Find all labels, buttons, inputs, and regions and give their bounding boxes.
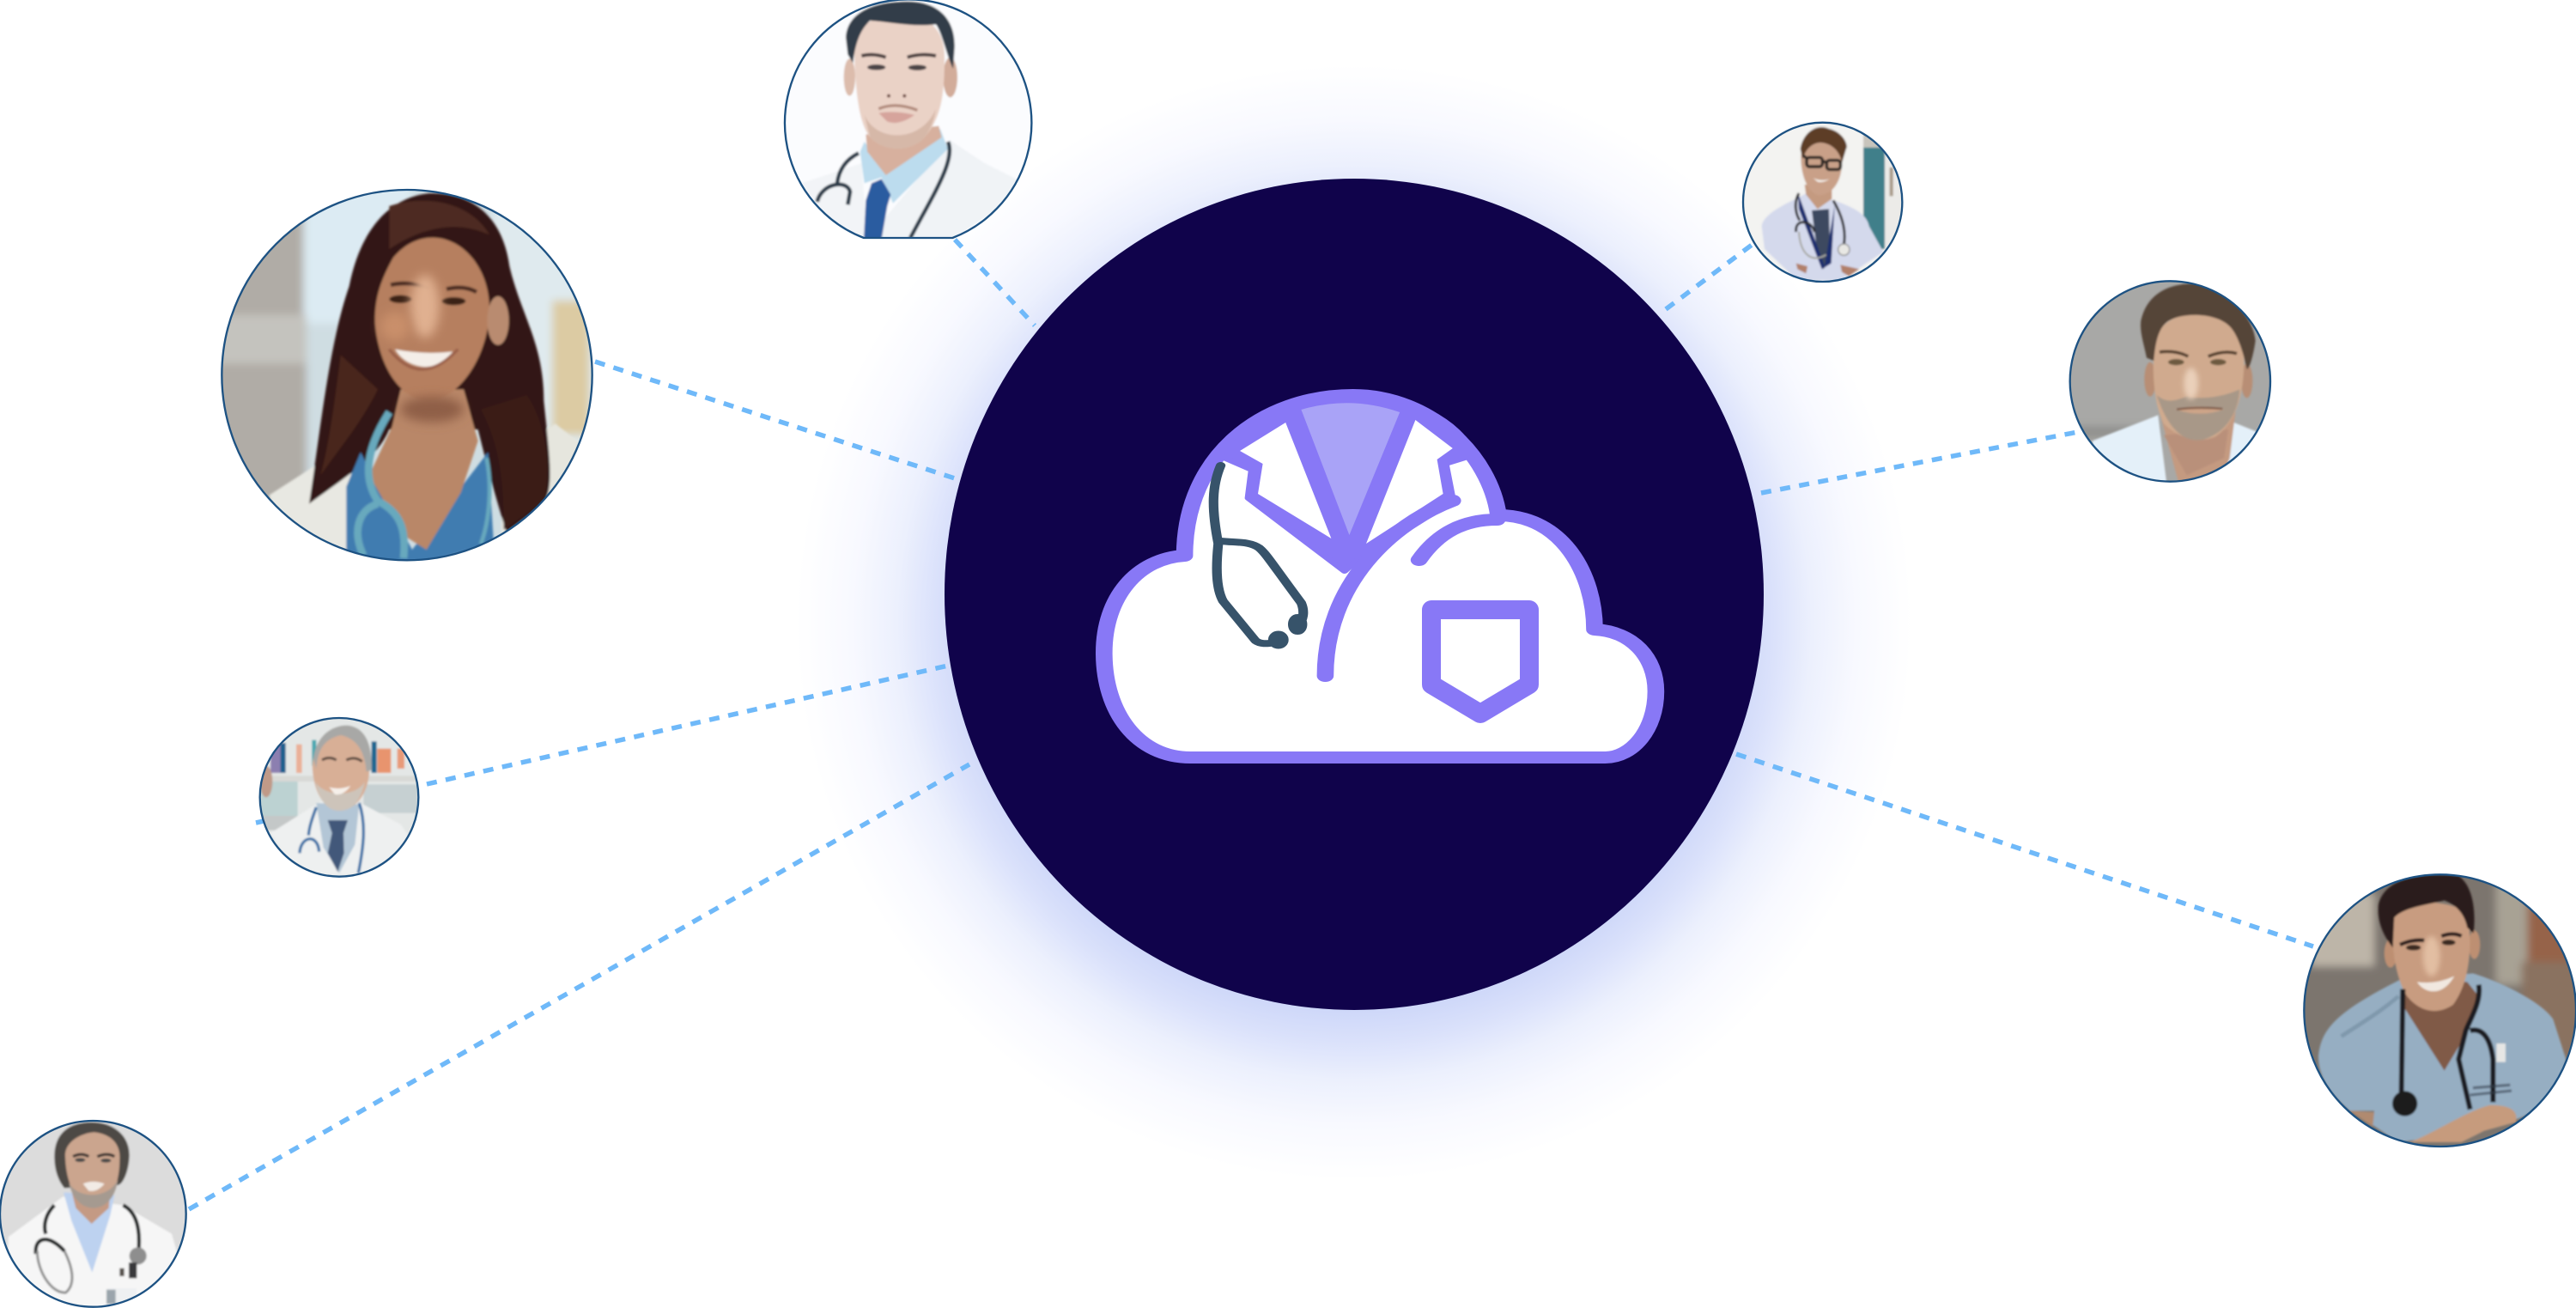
pocket shield — [1431, 610, 1529, 714]
coat collar — [1218, 395, 1473, 571]
stethoscope — [300, 803, 363, 873]
face — [2154, 313, 2244, 440]
beard — [2157, 389, 2239, 441]
name embroidery — [2470, 1085, 2512, 1095]
coat — [804, 165, 864, 235]
face — [374, 238, 489, 401]
shirt — [316, 803, 359, 873]
tie — [864, 179, 890, 239]
face — [65, 1132, 119, 1208]
cloud body — [1104, 395, 1656, 757]
hair — [313, 726, 372, 771]
tie — [1812, 209, 1831, 269]
scrubs — [346, 453, 494, 567]
hair — [846, 2, 955, 69]
neck — [1805, 185, 1832, 209]
portrait: woman doctor — [212, 180, 604, 573]
left lapel panel — [1240, 423, 1331, 538]
portrait: smiling doctor in scrubs — [2295, 867, 2576, 1157]
face — [2393, 903, 2470, 1011]
lanyard — [1798, 193, 1835, 269]
arm — [2410, 1105, 2517, 1142]
coat — [270, 801, 410, 876]
central hub circle — [945, 179, 1764, 1010]
face — [1801, 138, 1842, 195]
shirt — [2093, 415, 2258, 484]
coat front seam — [1325, 501, 1453, 676]
background glow — [796, 64, 1912, 1181]
portrait: man with beard — [2061, 275, 2281, 492]
coat — [269, 444, 355, 567]
id badge — [2496, 1043, 2506, 1062]
shelves with books — [270, 743, 285, 773]
pocket line — [1419, 520, 1498, 560]
neck — [71, 1191, 110, 1224]
neck — [866, 126, 942, 175]
features — [2400, 934, 2462, 945]
portrait: young male doctor — [783, 0, 1033, 239]
skin shading — [380, 275, 464, 423]
neck — [2404, 982, 2479, 1071]
portrait: doctor with grey hair and white coat — [0, 1119, 189, 1308]
ears — [844, 58, 855, 96]
portrait: doctor with glasses — [1741, 120, 1906, 286]
tie — [328, 820, 348, 872]
chest — [369, 389, 478, 550]
arms — [1796, 264, 1859, 277]
coat — [7, 1196, 178, 1308]
stethoscope — [2402, 985, 2493, 1110]
hair — [2379, 875, 2475, 947]
stethoscope — [817, 142, 950, 238]
ears — [2385, 939, 2397, 968]
stethoscope — [358, 412, 404, 558]
hair — [54, 1122, 130, 1188]
hair — [1801, 127, 1847, 163]
hair — [2141, 283, 2256, 369]
shirt triangle — [1301, 403, 1400, 535]
portrait: older doctor in pharmacy — [258, 715, 421, 879]
ears — [2144, 362, 2156, 397]
body — [1762, 193, 1883, 281]
hair strands — [481, 395, 547, 530]
collar — [860, 129, 948, 204]
scrubs — [2318, 973, 2566, 1142]
id badge — [106, 1288, 137, 1305]
features — [2160, 351, 2237, 356]
stethoscope — [36, 1205, 139, 1254]
stethoscope — [1213, 465, 1303, 646]
dashed connector lines — [189, 240, 2313, 1209]
face — [313, 734, 369, 811]
stethoscope — [1795, 193, 1844, 245]
face — [853, 19, 946, 136]
features — [861, 55, 936, 58]
glasses — [1802, 155, 1840, 169]
smile — [1814, 178, 1830, 182]
right lapel panel — [1366, 420, 1453, 544]
icon: cloud with doctor coat — [1104, 395, 1656, 757]
shirt — [64, 1192, 114, 1273]
neck — [2160, 412, 2235, 481]
hair — [309, 193, 550, 532]
